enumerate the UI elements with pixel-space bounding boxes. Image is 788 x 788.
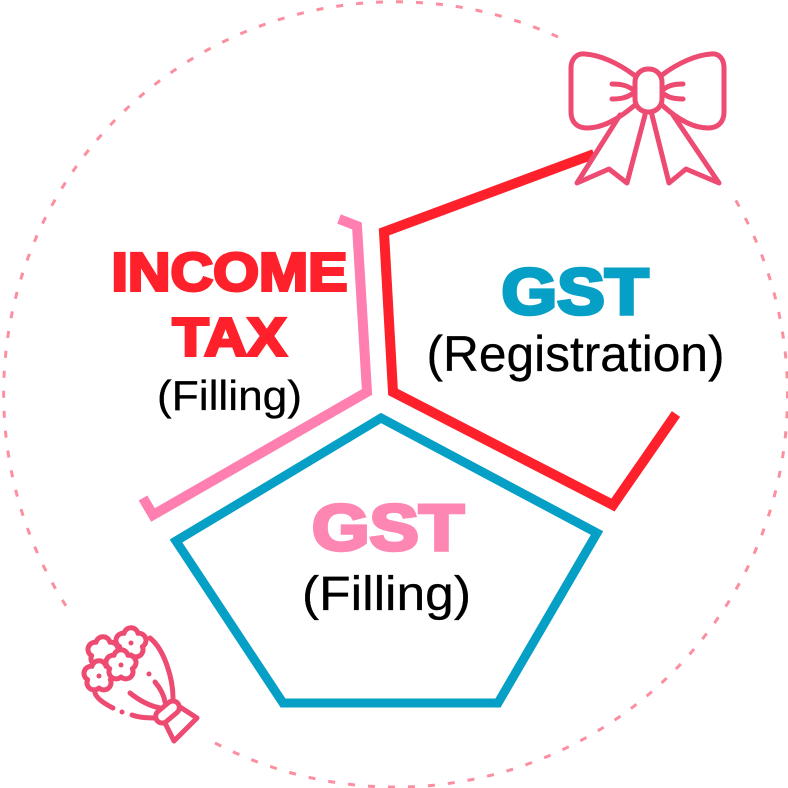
GST filling subtitle: (Filling) (302, 568, 471, 621)
income tax subtitle: (Filling) (157, 372, 302, 419)
income tax heading (112, 242, 348, 368)
income tax heading: TAX (172, 308, 286, 368)
GST registration subtitle: (Registration) (426, 326, 724, 382)
GST filling heading: GST (312, 491, 464, 564)
icon: flower bouquet (84, 628, 197, 741)
blue GST filling pentagon (176, 418, 597, 703)
icon: bow (571, 54, 724, 183)
GST registration heading: GST (502, 255, 648, 328)
pink income tax outline (143, 219, 367, 515)
red GST registration outline (384, 154, 676, 505)
income tax heading: INCOME (112, 242, 348, 302)
